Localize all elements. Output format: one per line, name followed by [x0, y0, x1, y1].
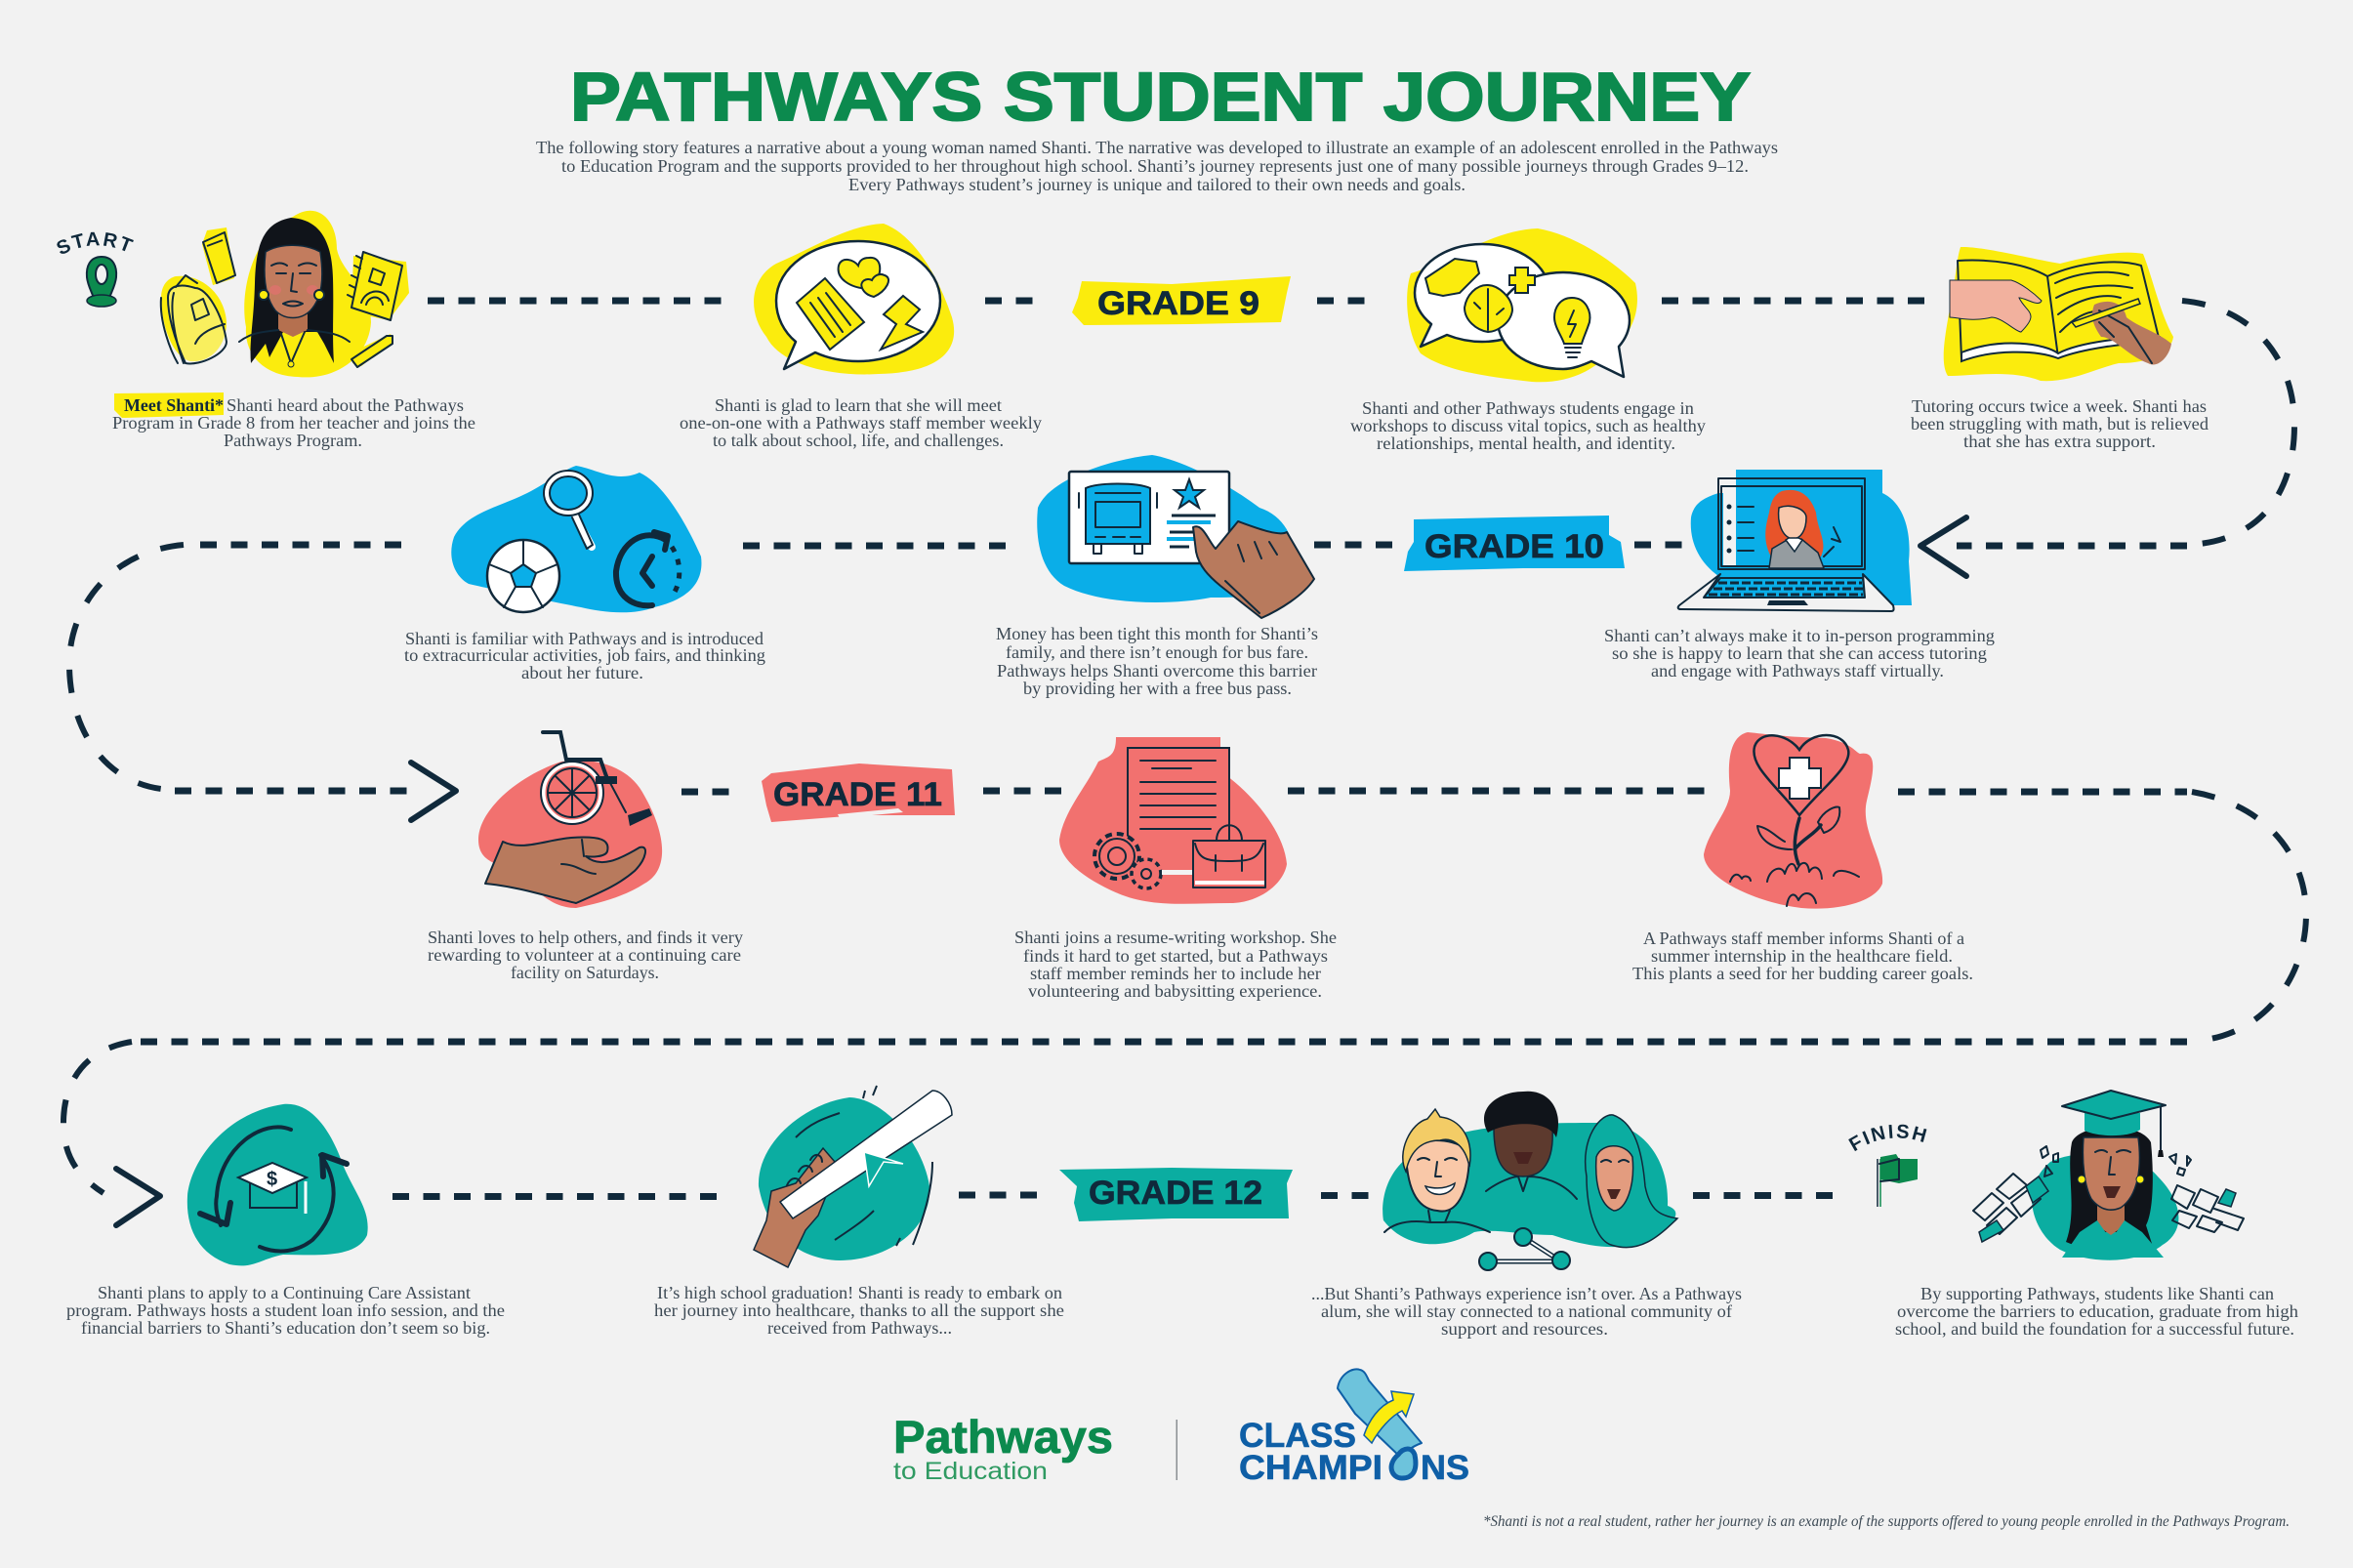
text: student loans: program. Pathways hosts a student loan info session, and the [66, 1300, 505, 1320]
illustration: speech bubble [754, 224, 954, 374]
text: graduation: received from Pathways... [767, 1318, 952, 1338]
text: volunteering: facility on Saturdays. [511, 963, 659, 982]
logo: Class Champions: CLASS [1239, 1417, 1356, 1455]
icon: finish flag: FINISH [1848, 1125, 1927, 1152]
graduation cap with dollar sign [238, 1163, 307, 1214]
text: Meet Shanti [112, 392, 475, 450]
intro text [536, 138, 1778, 194]
text: extracurricular: about her future. [521, 663, 643, 682]
text: workshops: Shanti and other Pathways students engage in [1362, 398, 1694, 418]
lightning [881, 296, 923, 350]
person: left [1384, 1109, 1490, 1232]
person: right with hijab [1586, 1115, 1677, 1248]
card lines [1170, 516, 1216, 547]
neck and top [278, 305, 308, 337]
logo: Pathways to Education: to Education [893, 1458, 1048, 1485]
face [265, 245, 322, 318]
text: closing: overcome the barriers to education, graduate from high [1897, 1301, 2298, 1321]
gears [1094, 834, 1161, 888]
text: resume [1014, 928, 1337, 1001]
text: bus pass: family, and there isn’t enough for bus fare. [1006, 642, 1308, 662]
intro text: The following story features a narrative about a young woman named Shanti. The narrative was developed to illustrate an example of an adolescent enrolled in the Pathways [536, 138, 1778, 157]
illustration: tutoring book [1944, 247, 2173, 381]
text: extracurricular: Shanti is familiar with Pathways and is introduced [405, 629, 764, 648]
clock arrow [616, 532, 680, 605]
brain [1465, 285, 1512, 332]
text: workshops: workshops to discuss vital topics, such as healthy [1350, 416, 1706, 435]
logo: Class Champions [1239, 1369, 1469, 1487]
heading: grade 11: GRADE 11 [773, 776, 942, 813]
arrow: into wheelchair [411, 763, 456, 820]
text: tutoring: Tutoring occurs twice a week. Shanti has [1912, 396, 2207, 416]
text: bus pass: Pathways helps Shanti overcome this barrier [997, 661, 1317, 681]
illustration: resume and briefcase [1059, 737, 1287, 904]
star [1175, 479, 1204, 508]
text: bus pass [996, 624, 1318, 698]
bulb [1554, 298, 1589, 344]
heading: grade 11 [762, 763, 955, 822]
text: student loans [66, 1283, 505, 1338]
illustration: ball, magnifier, clock [451, 466, 701, 612]
text: resume: finds it hard to get started, but a Pathways [1023, 946, 1328, 966]
text: closing [1895, 1284, 2298, 1339]
illustration: heart plant [1704, 732, 1882, 909]
ball [487, 540, 559, 612]
cross [1509, 268, 1535, 293]
heading: grade 9 [1072, 276, 1291, 325]
text: graduation: It’s high school graduation! Shanti is ready to embark on [657, 1283, 1062, 1302]
text: weekly staff meetings: one-on-one with a Pathways staff member weekly [680, 413, 1042, 433]
fingers [787, 1155, 822, 1185]
illustration: loan cap [187, 1104, 368, 1265]
icon: start pin [57, 232, 134, 308]
heading: grade 12 [1059, 1168, 1293, 1221]
text: weekly staff meetings [680, 395, 1042, 450]
text: alumni: support and resources. [1441, 1319, 1608, 1339]
intro text: Every Pathways student’s journey is unique and tailored to their own needs and goals. [848, 175, 1465, 194]
text: resume: volunteering and babysitting experience. [1028, 981, 1322, 1001]
face [2083, 1137, 2139, 1210]
text: graduation: her journey into healthcare, thanks to all the support she [654, 1300, 1064, 1320]
highlight [114, 392, 224, 418]
text: tutoring: that she has extra support. [1963, 432, 2156, 451]
logo: Class Champions: NS [1421, 1449, 1469, 1487]
illustration: diploma in hand [754, 1086, 952, 1267]
stem and leaves [1795, 818, 1821, 864]
heading: grade 10 [1404, 516, 1625, 571]
wheelchair [541, 732, 652, 826]
left hand [1950, 280, 2042, 332]
dashed journey path [63, 301, 2306, 1197]
text: resume: Shanti joins a resume-writing workshop. She [1014, 928, 1337, 947]
text: internship: summer internship in the healthcare field. [1651, 946, 1953, 966]
book [1958, 261, 2160, 359]
rubble [2041, 1146, 2191, 1176]
text: Meet Shanti: Pathways Program. [224, 431, 362, 450]
intro text: to Education Program and the supports provided to her throughout high school. Shanti’s journey represents just one of many possible journeys through Grades 9–12. [561, 156, 1749, 176]
text: tutoring [1911, 396, 2209, 451]
text: closing: By supporting Pathways, students like Shanti can [1920, 1284, 2274, 1303]
paper [797, 278, 864, 350]
text: alumni: alum, she will stay connected to a national community of [1321, 1301, 1732, 1321]
text: virtual: Shanti can’t always make it to in-person programming [1604, 626, 1995, 645]
left bubble [1415, 244, 1549, 347]
text: volunteering: rewarding to volunteer at a continuing care [428, 945, 741, 965]
text: virtual: so she is happy to learn that she can access tutoring [1612, 643, 1987, 663]
cap [2085, 1113, 2140, 1135]
text: Meet Shanti: Shanti heard about the Pathways [227, 395, 464, 415]
text: student loans: financial barriers to Shanti’s education don’t seem so big. [81, 1318, 490, 1338]
text: alumni [1311, 1284, 1742, 1339]
text: internship: This plants a seed for her budding career goals. [1632, 964, 1973, 983]
laptop base [1678, 574, 1894, 611]
medical cross [1779, 758, 1821, 799]
text: student loans: Shanti plans to apply to a Continuing Care Assistant [98, 1283, 471, 1302]
notebook [351, 252, 402, 320]
text: workshops: relationships, mental health, and identity. [1377, 433, 1675, 453]
pen [2072, 299, 2140, 327]
text: internship [1632, 928, 1973, 983]
right bubble [1498, 272, 1630, 377]
text: weekly staff meetings: Shanti is glad to learn that she will meet [715, 395, 1002, 415]
icon: finish flag [1848, 1125, 1927, 1207]
heart [1754, 735, 1848, 815]
arrow: into laptop [1920, 517, 1966, 576]
graduation cap with dollar sign: $ [267, 1169, 277, 1190]
text: virtual [1604, 626, 1995, 681]
text: extracurricular [404, 629, 765, 682]
magnifier [544, 471, 593, 549]
text: alumni: ...But Shanti’s Pathways experience isn’t over. As a Pathways [1311, 1284, 1742, 1303]
right hand [2092, 302, 2171, 365]
icon: start pin: START [57, 232, 134, 254]
text: extracurricular: to extracurricular activities, job fairs, and thinking [404, 645, 765, 665]
hearts [839, 258, 880, 289]
heading: grade 9: GRADE 9 [1097, 285, 1259, 322]
phone [203, 232, 235, 283]
heading: grade 12: GRADE 12 [1089, 1175, 1262, 1212]
document [1128, 748, 1229, 873]
text: workshops [1350, 398, 1706, 453]
hair [251, 218, 334, 363]
arrow: into loan cap [116, 1169, 160, 1225]
text: volunteering: Shanti loves to help others, and finds it very [428, 928, 743, 947]
text: tutoring: been struggling with math, but is relieved [1911, 414, 2209, 433]
heading: grade 10: GRADE 10 [1424, 528, 1604, 565]
text: closing: school, and build the foundation for a successful future. [1895, 1319, 2294, 1339]
vines [796, 1086, 932, 1246]
pencil [351, 336, 392, 367]
illustration: wheelchair and hand [478, 732, 662, 908]
text: virtual: and engage with Pathways staff virtually. [1651, 661, 1944, 681]
text: bus pass: by providing her with a free bus pass. [1023, 679, 1292, 698]
text: volunteering [428, 928, 743, 982]
handshake [1425, 259, 1479, 296]
keyboard [1704, 578, 1865, 598]
text: graduation [654, 1283, 1064, 1338]
illustration: bus pass [1037, 455, 1314, 618]
backpack [168, 285, 227, 363]
text: Meet Shanti: Meet Shanti* [124, 395, 224, 415]
illustration: alumni community [1383, 1092, 1677, 1270]
text: weekly staff meetings: to talk about school, life, and challenges. [713, 431, 1004, 450]
text: Meet Shanti: Program in Grade 8 from her teacher and joins the [112, 413, 475, 433]
illustration: Shanti with school items [161, 211, 409, 377]
title: PATHWAYS STUDENT JOURNEY [570, 59, 1751, 135]
text: resume: staff member reminds her to include her [1030, 964, 1321, 983]
hair [2066, 1127, 2154, 1250]
logo: Pathways to Education: Pathways [893, 1411, 1113, 1463]
footnote: *Shanti is not a real student, rather her journey is an example of the supports offered to young people enrolled in the Pathways Program. [1483, 1513, 2290, 1530]
tutor [1765, 490, 1840, 568]
network nodes [1479, 1228, 1570, 1270]
bus icon [1079, 484, 1157, 554]
diploma [780, 1091, 952, 1218]
text: bus pass: Money has been tight this month for Shanti’s [996, 624, 1318, 643]
illustration: graduate Shanti [1973, 1091, 2244, 1260]
hand [754, 1148, 835, 1267]
illustration: workshop bubbles [1407, 228, 1637, 382]
bricks left [1973, 1174, 2048, 1242]
logo: Pathways to Education [893, 1411, 1113, 1485]
hand [1193, 521, 1314, 618]
person: middle [1484, 1092, 1577, 1199]
illustration: laptop virtual tutoring [1678, 470, 1912, 611]
neck and gown [2097, 1196, 2125, 1235]
logo: Class Champions: CHAMPI [1239, 1449, 1383, 1487]
hand [485, 838, 645, 903]
bricks right [2171, 1185, 2244, 1232]
briefcase [1162, 825, 1265, 887]
text: internship: A Pathways staff member informs Shanti of a [1643, 928, 1964, 948]
